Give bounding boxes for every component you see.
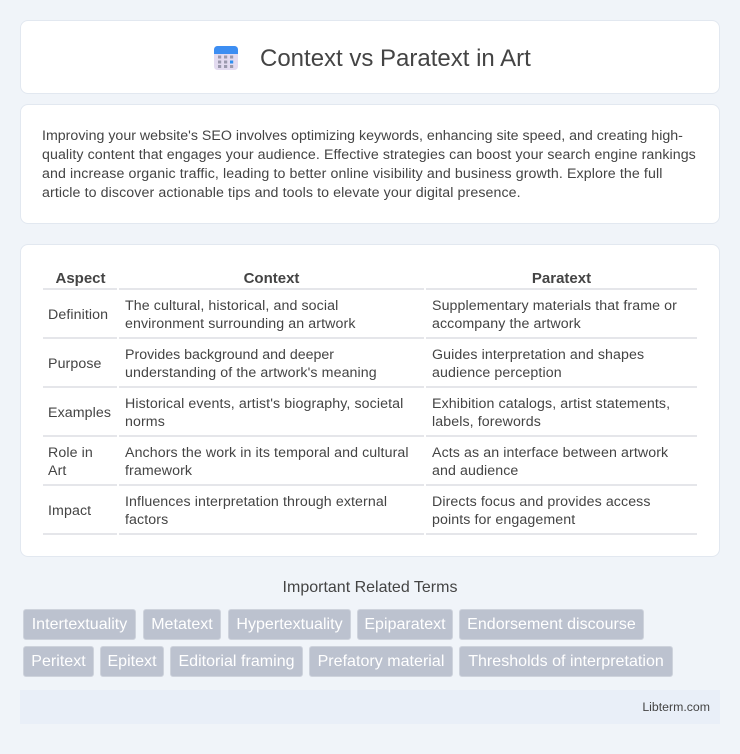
context: Impact [125, 494, 387, 528]
context: Examples: norms [125, 414, 165, 430]
footer bar [20, 690, 720, 724]
context: Definition: The cultural, historical, and social [125, 298, 338, 314]
context: Purpose: understanding of the artwork's meaning [125, 365, 377, 381]
row label: Examples: Examples [48, 405, 111, 421]
paratext: Role in Art: and audience [432, 463, 518, 479]
tag: Prefatory material: Prefatory material [318, 653, 444, 670]
row label: Impact: Impact [48, 503, 91, 519]
panel: comparison table [20, 244, 720, 557]
paratext: Purpose: Guides interpretation and shapes [432, 347, 644, 363]
paratext: Role in Art: Acts as an interface between artwork [432, 445, 668, 461]
tag: Endorsement discourse: Endorsement discourse [467, 616, 636, 633]
context: Impact: factors [125, 512, 168, 528]
footer text: Libterm.com [642, 700, 710, 714]
column header: Context: Context [244, 270, 299, 287]
intro text: quality content that engages your audience. Effective strategies can boost your search engine rankings [42, 147, 696, 163]
paratext: Impact: Directs focus and provides access [432, 494, 651, 510]
tag: Intertextuality [23, 609, 136, 640]
tag: Intertextuality: Intertextuality [32, 616, 127, 633]
tag: Editorial framing [170, 646, 303, 677]
panel: intro paragraph [20, 104, 720, 224]
intro text: article to discover actionable tips and tools to elevate your digital presence. [42, 185, 521, 201]
paratext: Role in Art [432, 445, 668, 479]
paratext: Definition: Supplementary materials that frame or [432, 298, 677, 314]
paratext: Examples: Exhibition catalogs, artist statements, [432, 396, 670, 412]
tag: Epitext [100, 646, 164, 677]
context: Role in Art [125, 445, 409, 479]
heading: related terms: Important Related Terms [283, 579, 457, 596]
intro text [42, 128, 696, 201]
context: Definition [125, 298, 356, 332]
paratext: Definition [432, 298, 677, 332]
intro text: and increase organic traffic, leading to better online visibility and business growth. Explore the full [42, 166, 662, 182]
context: Purpose: Provides background and deeper [125, 347, 334, 363]
tag: Editorial framing: Editorial framing [178, 653, 295, 670]
row label: Role in Art [48, 445, 93, 479]
context: Role in Art: Anchors the work in its temporal and cultural [125, 445, 409, 461]
tag: Thresholds of interpretation: Thresholds of interpretation [468, 653, 664, 670]
context: Definition: environment surrounding an artwork [125, 316, 356, 332]
paratext: Impact [432, 494, 651, 528]
tag: Hypertextuality [228, 609, 351, 640]
icon: calendar [214, 46, 238, 70]
tag: Hypertextuality: Hypertextuality [236, 616, 343, 633]
context: Impact: Influences interpretation through external [125, 494, 387, 510]
context: Role in Art: framework [125, 463, 192, 479]
panel: title header [20, 20, 720, 94]
tag: Thresholds of interpretation [459, 646, 673, 677]
column header: Aspect: Aspect [55, 270, 106, 287]
row label: Role in Art: Role in [48, 445, 93, 461]
tag: Epiparatext [357, 609, 453, 640]
row label: Definition: Definition [48, 307, 108, 323]
tag: Peritext [23, 646, 94, 677]
paratext: Impact: points for engagement [432, 512, 575, 528]
paratext: Purpose: audience perception [432, 365, 562, 381]
row label: Role in Art: Art [48, 463, 66, 479]
column header: Paratext: Paratext [532, 270, 591, 287]
tag: Peritext: Peritext [31, 653, 86, 670]
paratext: Definition: accompany the artwork [432, 316, 581, 332]
tag: Epitext: Epitext [107, 653, 157, 670]
context: Purpose [125, 347, 377, 381]
tag: Endorsement discourse [459, 609, 644, 640]
intro text: Improving your website's SEO involves optimizing keywords, enhancing site speed, and creating high- [42, 128, 683, 144]
context: Examples: Historical events, artist's biography, societal [125, 396, 403, 412]
title: Context vs Paratext in Art [260, 45, 531, 72]
tag: Prefatory material [309, 646, 453, 677]
paratext: Examples: labels, forewords [432, 414, 541, 430]
paratext: Purpose [432, 347, 644, 381]
tag: Epiparatext: Epiparatext [364, 616, 446, 633]
tag: Metatext: Metatext [151, 616, 213, 633]
tag: Metatext [143, 609, 221, 640]
paratext: Examples [432, 396, 670, 430]
context: Examples [125, 396, 403, 430]
row label: Purpose: Purpose [48, 356, 102, 372]
